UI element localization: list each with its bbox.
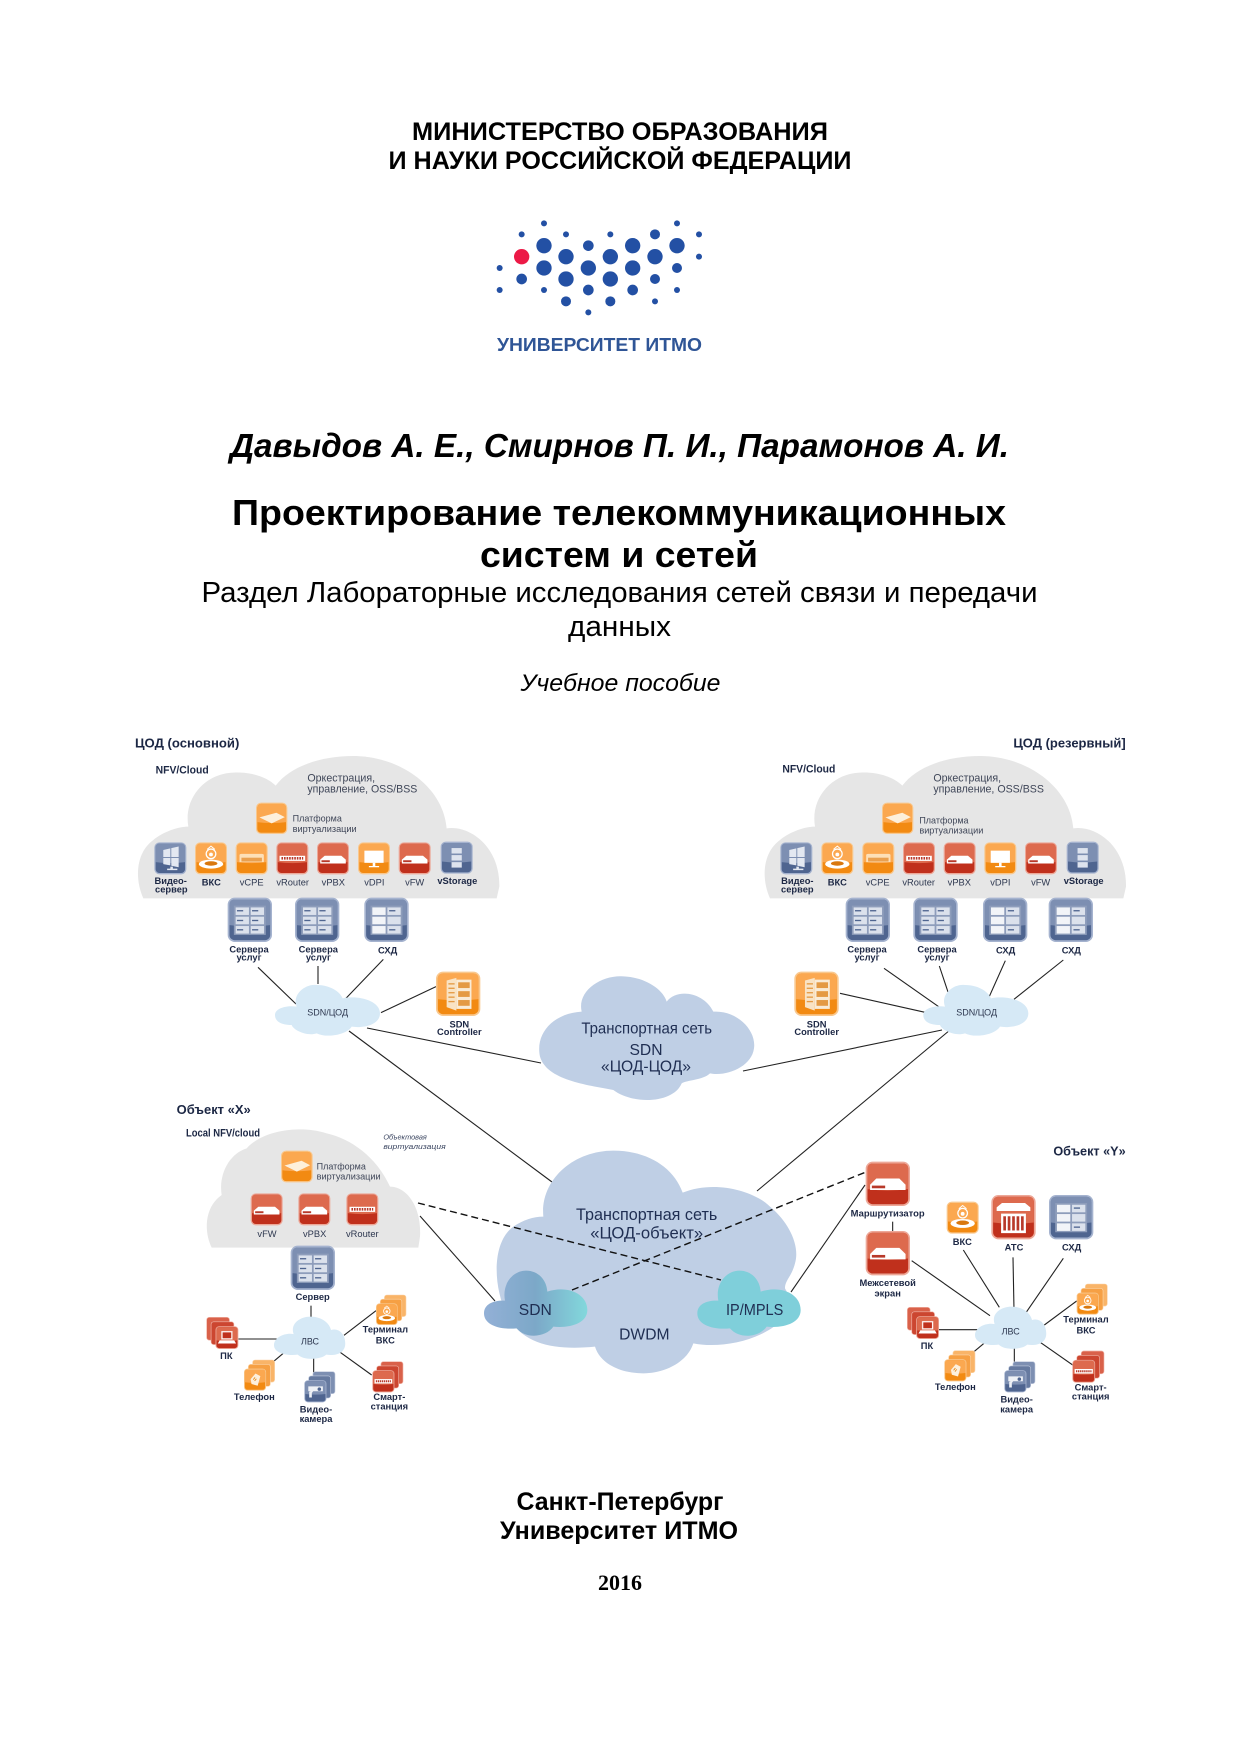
icon: vFW: vFW: [257, 1229, 277, 1239]
cloud: DC-object transport: DWDM: [619, 1326, 670, 1343]
icon: camera stack: камера: [300, 1414, 333, 1424]
icon: vFW: vFW: [405, 878, 424, 888]
heading: ministry: [388, 118, 852, 175]
icon: vPBX: vPBX: [948, 878, 972, 888]
icon: video server: Видео-: [154, 876, 187, 886]
icon: SDN controller: [794, 973, 839, 1037]
icon: storage 1: СХД: [996, 945, 1016, 955]
heading: main DC: ЦОД (основной): [135, 736, 239, 751]
icon: PBX: АТС: [1005, 1243, 1024, 1253]
icon: vCPE: vCPE: [240, 878, 264, 888]
network diagram: [135, 736, 1126, 1424]
cloud: LAN: [975, 1307, 1046, 1349]
icon: service servers 1: Сервера: [847, 944, 887, 954]
icon: virtualization platform: Платформа: [293, 814, 342, 824]
icon: smart station stack: [1072, 1351, 1109, 1401]
panel: object X: [177, 1102, 446, 1424]
label: object virtualization: Объектовая: [383, 1132, 427, 1141]
icon: vDPI: vDPI: [990, 878, 1010, 888]
icon: virtualization platform: [883, 803, 983, 836]
icon: virtualization platform: Платформа: [919, 815, 969, 825]
subtitle: Раздел Лабораторные исследования сетей связи и передачи: [202, 577, 1038, 609]
icon: SDN controller: SDN: [807, 1019, 827, 1029]
cloud: DC-object transport: Транспортная сеть: [576, 1205, 717, 1224]
subtitle: [202, 577, 1038, 643]
icon: camera stack: Видео-: [300, 1404, 332, 1414]
icon: virtualization platform: [257, 803, 357, 834]
icon: vStorage: [1064, 842, 1104, 886]
cloud: LAN: ЛВС: [301, 1336, 320, 1346]
icon: terminal stack: ВКС: [376, 1335, 395, 1345]
icon: storage: СХД: [378, 945, 398, 955]
icon: storage 2: СХД: [1062, 945, 1081, 955]
icon: service servers 2: Сервера: [917, 944, 957, 954]
icon: vFW: [1026, 843, 1056, 888]
icon: smart station stack: станция: [1072, 1391, 1109, 1401]
icon: SDN controller: SDN: [449, 1019, 469, 1029]
icon: camera stack: [300, 1372, 335, 1424]
icon: vPBX: [299, 1194, 330, 1239]
panel: transport clouds: [484, 976, 801, 1373]
icon: vPBX: vPBX: [303, 1229, 327, 1239]
icon: service servers 1: услуг: [854, 953, 880, 963]
icon: vDPI: vDPI: [364, 878, 384, 888]
icon: vStorage: [437, 842, 477, 886]
publisher: [500, 1488, 738, 1545]
icon: VKS: [196, 843, 226, 888]
icon: smart station stack: станция: [371, 1401, 408, 1411]
cloud: local NFV: [207, 1129, 420, 1248]
cloud: SDN/DC: [923, 985, 1028, 1036]
icon: PC stack: [907, 1307, 939, 1351]
icon: video server: сервер: [155, 885, 188, 895]
icon: virtualization platform: виртуализации: [919, 826, 983, 836]
icon: terminal stack: [1063, 1284, 1109, 1335]
icon: video server: сервер: [781, 885, 814, 895]
label: NFV/Cloud: NFV/Cloud: [156, 764, 209, 776]
icon: vCPE: [863, 843, 894, 888]
heading: backup DC: ЦОД (резервный]: [1013, 736, 1126, 751]
icon: smart station stack: Смарт-: [1075, 1383, 1107, 1393]
panel: object Y: [851, 1144, 1126, 1414]
panel: main data centre: [135, 736, 499, 1037]
icon: SDN controller: Controller: [794, 1027, 839, 1037]
icon: smart station stack: Смарт-: [373, 1392, 405, 1402]
cloud: LAN: [274, 1317, 345, 1359]
icon: server: [292, 1247, 334, 1302]
label: orchestration: [933, 772, 1044, 796]
label: orchestration: Оркестрация,: [307, 772, 375, 784]
icon: vPBX: [944, 843, 975, 888]
label: orchestration: [307, 772, 417, 796]
icon: virtualization platform: виртуализации: [317, 1172, 381, 1182]
icon: virtualization platform: виртуализации: [293, 824, 357, 834]
cloud: DC-object transport: «ЦОД-объект»: [590, 1224, 703, 1243]
icon: VKS: [822, 843, 853, 888]
icon: vFW: [251, 1194, 282, 1239]
icon: storage 2: [1050, 899, 1092, 955]
cloud: DC-object transport: [497, 1151, 796, 1373]
logo: ITMO University: УНИВЕРСИТЕТ ИТМО: [497, 335, 702, 355]
cloud: SDN/DC: [275, 985, 380, 1036]
label: orchestration: Оркестрация,: [933, 772, 1001, 784]
icon: vCPE: [236, 843, 267, 888]
cloud: SDN/DC: SDN/ЦОД: [956, 1008, 997, 1018]
icon: PC stack: ПК: [921, 1341, 933, 1351]
icon: storage: [365, 899, 408, 955]
icon: smart station stack: [371, 1362, 408, 1411]
cloud: DC-DC transport: «ЦОД-ЦОД»: [601, 1059, 691, 1076]
cloud: SDN: SDN: [519, 1302, 552, 1319]
icon: video server: [781, 843, 814, 895]
icon: vPBX: vPBX: [322, 878, 346, 888]
icon: vRouter: [902, 843, 935, 888]
icon: storage: СХД: [1062, 1243, 1082, 1253]
year: 2016: [598, 1570, 642, 1595]
links to SDN cloud: [840, 960, 1063, 1013]
icon: virtualization platform: Платформа: [317, 1161, 366, 1171]
icon: service servers 2: Сервера: [299, 944, 339, 954]
links to SDN cloud: [258, 959, 436, 1013]
cloud: DC-DC transport: Транспортная сеть: [581, 1020, 712, 1037]
icon: terminal stack: Терминал: [363, 1324, 408, 1334]
icon: service servers 1: Сервера: [229, 944, 269, 954]
icon: SDN controller: Controller: [437, 1027, 482, 1037]
icon: terminal stack: ВКС: [1076, 1325, 1096, 1335]
label: object virtualization: виртуализация: [383, 1142, 446, 1151]
icon: server: Сервер: [296, 1292, 330, 1302]
icon: PC stack: [207, 1317, 238, 1361]
icon: vRouter: vRouter: [276, 878, 309, 888]
publisher: Санкт-Петербург: [516, 1488, 724, 1516]
icon: PBX: [992, 1196, 1035, 1253]
LAN links: [912, 1250, 1077, 1365]
icon: virtualization platform: [282, 1151, 381, 1182]
icon: phone stack: Телефон: [234, 1392, 275, 1402]
icon: vPBX: [318, 843, 348, 888]
cloud: NFV: [765, 756, 1126, 898]
publisher: Университет ИТМО: [500, 1517, 738, 1545]
icon: terminal stack: [363, 1295, 408, 1345]
cloud: DC-DC transport: SDN: [629, 1042, 663, 1059]
label: orchestration: управление, OSS/BSS: [933, 784, 1044, 796]
icon: storage: [1050, 1196, 1092, 1253]
icon: service servers 2: [296, 899, 339, 963]
cloud: NFV: [138, 756, 499, 898]
dashed tunnels: [418, 1172, 866, 1290]
icon: VKS: ВКС: [202, 878, 221, 888]
label: object virtualization: [383, 1132, 446, 1151]
icon: VKS: [947, 1202, 978, 1247]
icon: VKS: ВКС: [828, 878, 847, 888]
icon: terminal stack: Терминал: [1063, 1314, 1109, 1324]
icon: vDPI: [359, 843, 389, 888]
icon: firewall: экран: [874, 1289, 901, 1299]
heading: object X: Объект «X»: [177, 1102, 251, 1117]
icon: vCPE: vCPE: [866, 878, 890, 888]
title: систем и сетей: [480, 534, 758, 575]
icon: vRouter: vRouter: [346, 1229, 379, 1239]
icon: firewall: Межсетевой: [859, 1278, 916, 1288]
icon: vDPI: [985, 843, 1016, 888]
icon: phone stack: Телефон: [935, 1382, 976, 1392]
subtitle: данных: [568, 611, 671, 643]
label: local NFV: Local NFV/cloud: [186, 1128, 260, 1140]
icon: SDN controller: [437, 973, 482, 1037]
icon: vRouter: [346, 1194, 379, 1239]
icon: vRouter: [276, 843, 309, 888]
LAN links: [238, 1306, 376, 1375]
authors: Давыдов А. Е., Смирнов П. И., Парамонов А. И.: [227, 428, 1009, 465]
icon: camera stack: [1000, 1362, 1035, 1414]
icon: service servers 1: [229, 899, 271, 963]
cloud: LAN: ЛВС: [1002, 1326, 1020, 1336]
icon: camera stack: камера: [1000, 1404, 1034, 1414]
label: NFV/Cloud: NFV/Cloud: [782, 763, 835, 775]
icon: VKS: ВКС: [953, 1237, 972, 1247]
subtitle: study guide: Учебное пособие: [519, 670, 720, 697]
icon: phone stack: [935, 1351, 976, 1392]
icon: service servers 1: услуг: [236, 953, 262, 963]
label: orchestration: управление, OSS/BSS: [307, 784, 417, 796]
icon: video server: [154, 843, 188, 895]
connection lines: [349, 1028, 950, 1301]
icon: storage 1: [984, 899, 1026, 955]
cloud: IP/MPLS: IP/MPLS: [726, 1302, 783, 1319]
icon: service servers 2: [914, 899, 957, 963]
cloud: SDN/DC: SDN/ЦОД: [307, 1008, 348, 1018]
icon: firewall: [859, 1222, 916, 1299]
icon: service servers 2: услуг: [924, 953, 950, 963]
icon: vRouter: vRouter: [902, 878, 935, 888]
icon: service servers 2: услуг: [306, 953, 331, 963]
icon: router: Маршрутизатор: [851, 1209, 925, 1219]
heading: ministry: И НАУКИ РОССИЙСКОЙ ФЕДЕРАЦИИ: [388, 145, 852, 175]
icon: camera stack: Видео-: [1000, 1395, 1033, 1405]
icon: vFW: [399, 843, 430, 888]
icon: vStorage: vStorage: [1064, 876, 1104, 886]
heading: ministry: МИНИСТЕРСТВО ОБРАЗОВАНИЯ: [412, 118, 828, 146]
icon: PC stack: ПК: [220, 1351, 233, 1361]
title: Проектирование телекоммуникационных: [232, 492, 1007, 533]
icon: video server: Видео-: [781, 876, 814, 886]
icon: phone stack: [234, 1360, 275, 1402]
cloud: DC-DC transport: [539, 976, 754, 1100]
heading: object Y: Объект «Y»: [1053, 1144, 1126, 1159]
logo: ITMO University: [497, 220, 702, 355]
title: [232, 492, 1007, 575]
icon: vStorage: vStorage: [437, 876, 477, 886]
cloud: IP/MPLS: [697, 1271, 801, 1336]
icon: router: [851, 1163, 925, 1219]
cloud: SDN: [484, 1271, 587, 1336]
icon: vFW: vFW: [1031, 878, 1050, 888]
icon: service servers 1: [847, 899, 889, 963]
panel: backup data centre: [765, 736, 1126, 1037]
